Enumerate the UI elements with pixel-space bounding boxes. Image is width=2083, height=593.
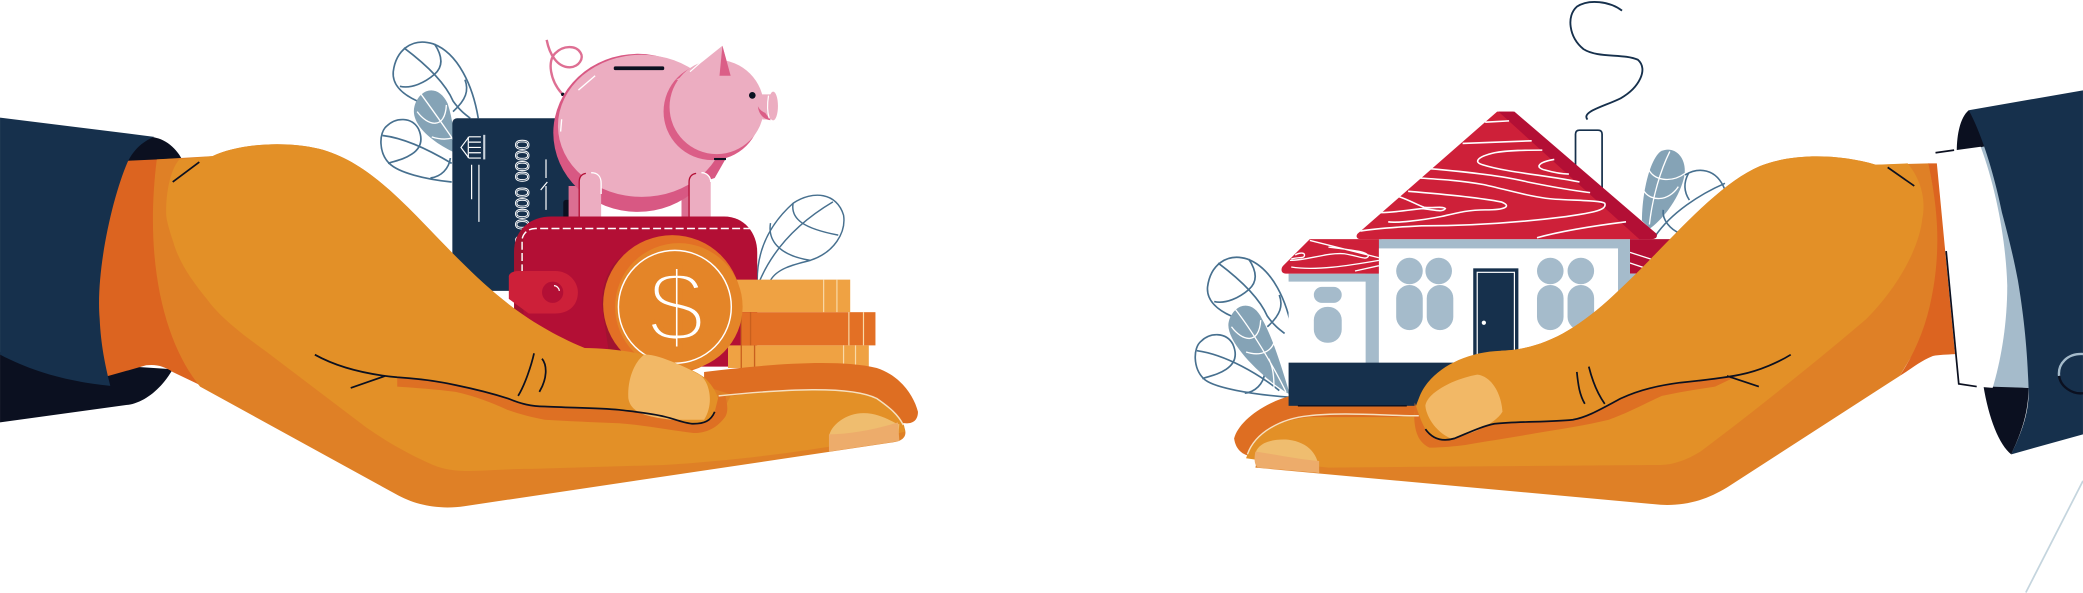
coin: $ xyxy=(648,251,704,363)
finger nail xyxy=(829,413,899,452)
pig ear xyxy=(690,46,731,82)
house leaves left xyxy=(1195,257,1293,397)
right hand with sleeve xyxy=(1246,90,2083,505)
icon: bank on card xyxy=(461,135,484,159)
thumb nail xyxy=(628,355,710,420)
left wing roof xyxy=(1282,239,1382,274)
thin line xyxy=(2026,481,2083,592)
coin xyxy=(603,235,743,373)
thumb nail xyxy=(1425,375,1502,438)
back finger of right hand xyxy=(1234,395,1461,458)
wrist xyxy=(1900,163,1955,376)
palm shadow xyxy=(1255,156,1942,505)
house leaves right xyxy=(1642,150,1725,236)
left hand with sleeve xyxy=(0,118,918,507)
main roof xyxy=(1357,112,1657,239)
coin slot xyxy=(614,66,664,70)
leaf beside wallet xyxy=(757,195,844,280)
hand lines xyxy=(1425,167,1914,440)
chimney xyxy=(1576,130,1602,193)
wallet clasp xyxy=(509,271,578,314)
house xyxy=(1282,112,1687,406)
pig front legs xyxy=(579,173,601,217)
right wing roof xyxy=(1630,239,1687,274)
foundation xyxy=(1289,363,1475,406)
thumb shadow xyxy=(1414,375,1740,448)
card number: 0000 0000 0000 xyxy=(510,139,531,278)
thumb shadow xyxy=(397,377,727,433)
sleeve xyxy=(0,118,154,386)
palm and thumb xyxy=(166,144,905,471)
wallet xyxy=(509,217,757,367)
pig body xyxy=(553,54,722,212)
piggy bank xyxy=(547,40,778,218)
left wing wall xyxy=(1289,274,1379,367)
shirt cuff shade xyxy=(1979,145,2029,388)
smoke xyxy=(1570,2,1642,120)
shirt cuff xyxy=(1937,147,2007,388)
windows xyxy=(1314,258,1594,343)
pig head xyxy=(664,63,761,160)
pig tail xyxy=(547,40,582,93)
pig back legs xyxy=(569,186,582,218)
sleeve lining xyxy=(1957,110,2029,454)
pig snout xyxy=(757,94,773,120)
sleeve lining xyxy=(0,137,182,422)
cuff button xyxy=(2059,354,2083,393)
back finger xyxy=(704,363,918,438)
wrist xyxy=(97,158,206,388)
palm and thumb xyxy=(1246,156,1924,468)
palm shadow xyxy=(153,144,905,507)
finger nail xyxy=(1255,440,1319,473)
coin stack xyxy=(728,280,875,368)
credit card xyxy=(452,118,579,291)
main wall xyxy=(1379,239,1630,372)
leaves behind the card xyxy=(381,42,478,182)
door xyxy=(1473,268,1518,361)
sleeve xyxy=(1969,90,2083,454)
hand lines xyxy=(173,162,715,424)
card lines xyxy=(472,159,547,222)
